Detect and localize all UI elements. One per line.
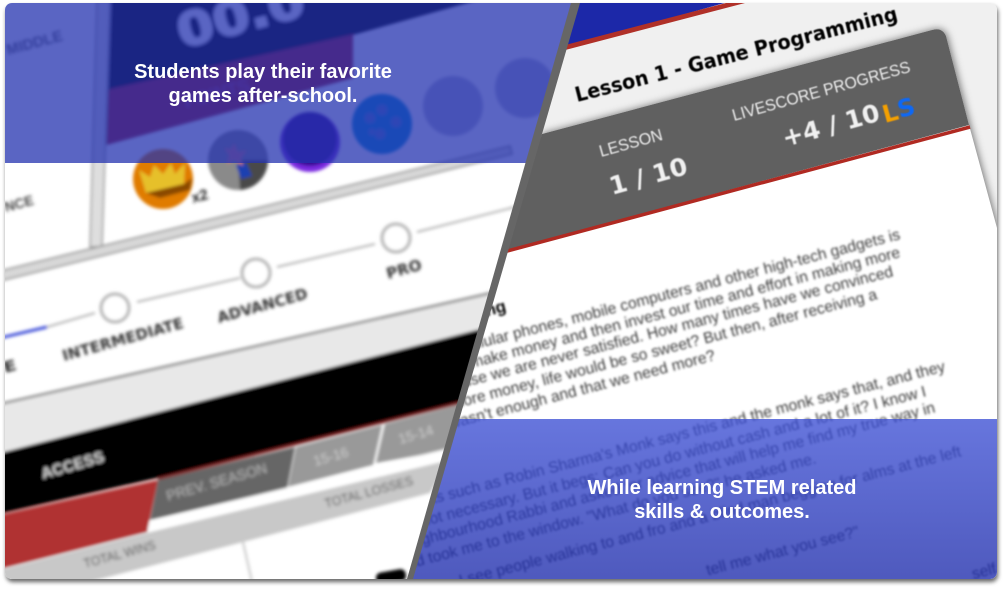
diagonal panel edge <box>0 146 512 281</box>
header red rule <box>500 127 970 253</box>
locked badge <box>423 76 483 136</box>
tab 15-14 <box>374 402 457 464</box>
hatched band <box>0 291 500 453</box>
level labels: PRO <box>384 256 424 283</box>
paragraph two <box>375 358 999 590</box>
left label fragment: NCE <box>3 192 35 215</box>
middle label: MIDDLE <box>5 28 65 59</box>
progress fill <box>0 327 47 338</box>
panel: game dashboard screenshot <box>0 0 575 590</box>
LS logo: S <box>894 92 918 124</box>
lesson header <box>500 29 969 252</box>
tab 15-16 <box>288 425 382 487</box>
paragraph two: and took me to the window. "What do you see?" he asked me. <box>397 450 818 575</box>
stats white stripe <box>148 448 450 530</box>
panel: game dashboard screenshot: PREV. SEASON <box>165 461 269 505</box>
lesson count: 1 / 10 <box>606 151 691 201</box>
stats cell divider <box>243 542 252 582</box>
caption: top: games after-school. <box>169 85 357 107</box>
level labels: INTERMEDIATE <box>60 314 186 365</box>
trophy <box>236 162 252 179</box>
purple badge <box>280 112 340 172</box>
paragraph two: my neighbourhood Rabbi and asked for advice that will help me find my true way in <box>375 399 937 560</box>
stats icon <box>374 566 408 579</box>
crown shadow <box>146 178 192 198</box>
paragraph one: because we are never satisfied. How many times have we convinced <box>427 263 895 400</box>
prev season tab <box>150 447 295 520</box>
paragraph two: is not necessary. But it begs: Can you do without cash and a lot of it? I know I <box>404 383 928 534</box>
caption: bottom: skills & outcomes. <box>634 501 810 523</box>
article text <box>375 226 999 590</box>
vertical divider <box>90 0 110 247</box>
lesson sheet <box>400 29 997 579</box>
level labels <box>1 256 424 377</box>
level labels: ADVANCED <box>215 285 310 327</box>
stats header row <box>5 461 440 579</box>
paragraph one <box>416 226 902 436</box>
lesson title: Lesson 1 - Game Programming <box>572 2 900 107</box>
panel: game dashboard screenshot: TOTAL LOSSES <box>323 473 415 511</box>
panel: lesson screenshot <box>375 0 1000 590</box>
blue header strip <box>568 3 724 44</box>
black score panel <box>106 3 472 92</box>
paragraph one: with more money, life would be so sweet? But then, after receiving a <box>416 286 879 421</box>
tab labels: ACCESS <box>39 449 106 483</box>
locked badge 2 <box>495 58 555 118</box>
black bar <box>0 324 500 514</box>
LS logo <box>879 92 918 129</box>
silver badge <box>208 130 268 190</box>
overlay band: top <box>5 3 575 163</box>
article heading: Learning <box>434 296 508 333</box>
paragraph one: We make money and then invest our time and effort in making more <box>442 244 902 379</box>
access tab <box>0 480 158 569</box>
level labels: E <box>1 356 19 377</box>
paragraph one: it wasn't enough and that we need more? <box>435 347 717 436</box>
badge count: x2 <box>190 186 210 207</box>
red header rule <box>566 3 745 50</box>
score label: POINTS <box>182 75 252 112</box>
angled divider <box>407 3 580 579</box>
lesson label: LESSON <box>597 125 665 161</box>
hatched band top line <box>0 291 500 404</box>
panel: game dashboard screenshot: 15-14 <box>396 422 435 447</box>
panel: game dashboard screenshot: 15-16 <box>311 444 350 469</box>
caption: bottom: While learning STEM related <box>588 477 856 499</box>
livescore label: LIVESCORE PROGRESS <box>730 57 912 125</box>
orange badge <box>133 149 193 209</box>
paragraph two: I see people walking to and fro and a blind man begging for alms at the left <box>457 443 964 590</box>
paragraph one: Cellular phones, mobile computers and other high-tech gadgets is <box>455 226 902 357</box>
panel: game dashboard screenshot: TOTAL WINS <box>82 537 158 571</box>
overlay band: bottom <box>400 419 1000 579</box>
thin red rule <box>158 403 460 479</box>
livescore value: +4 / 10 <box>779 98 883 153</box>
paragraph two: self <box>970 560 999 583</box>
caption: top: Students play their favorite <box>134 61 392 83</box>
paragraph two: tell me what you see?" <box>704 523 861 579</box>
progress track <box>47 207 515 327</box>
paragraph two: Books such as Robin Sharma's Monk says this and the monk says that, and they <box>400 358 947 515</box>
red score strip <box>106 35 353 145</box>
blue badge <box>352 94 412 154</box>
star <box>226 145 246 168</box>
crown <box>139 163 185 193</box>
LS logo: L <box>879 98 901 129</box>
